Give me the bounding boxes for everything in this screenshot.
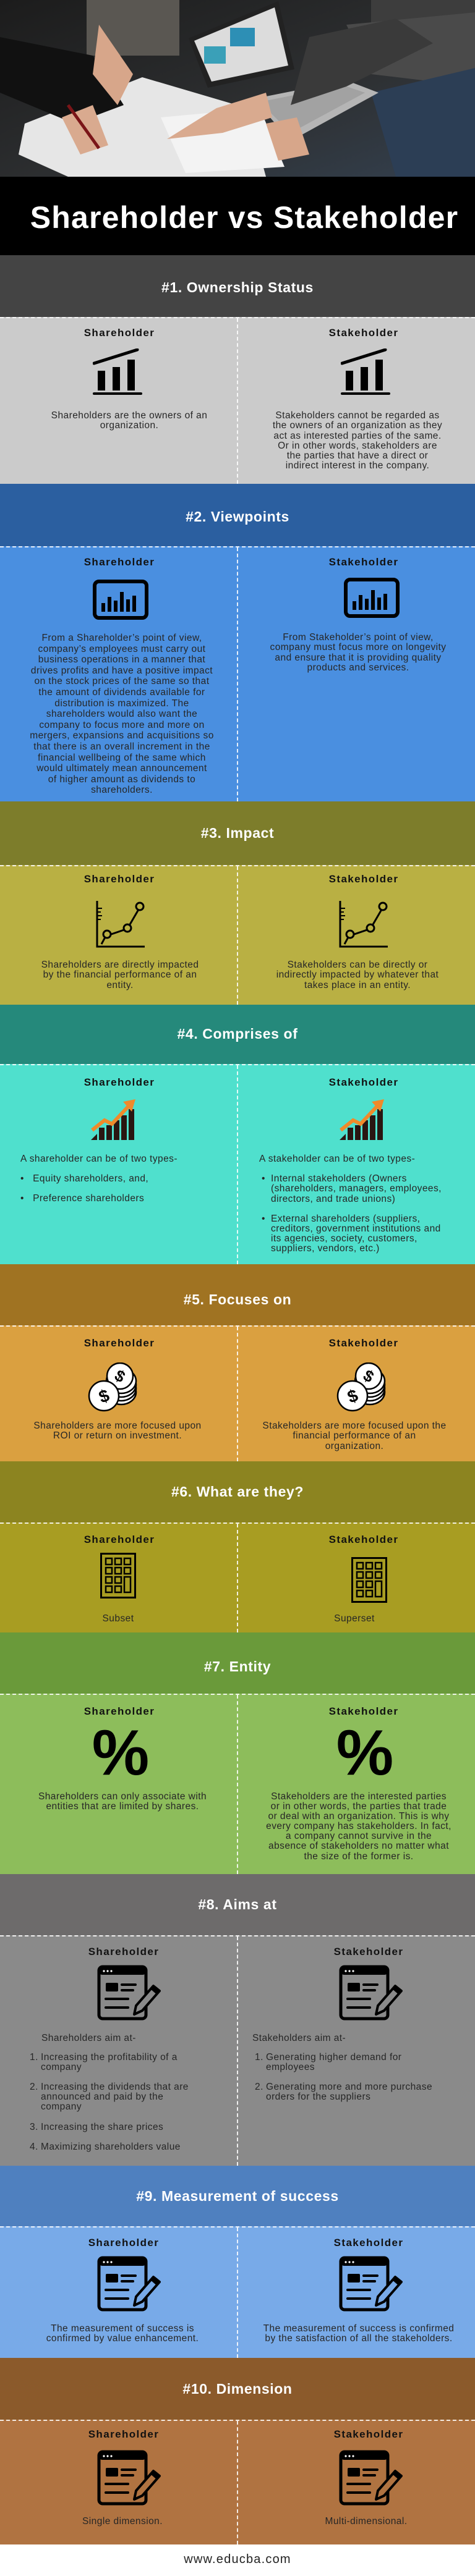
list: stakeholder aims: 2. [255, 2082, 263, 2092]
icon: growth left [91, 1099, 135, 1140]
text: shareholder viewpoint: company’s employees must carry out [38, 644, 205, 654]
text: stakeholder viewpoint [270, 632, 447, 673]
heading: Entity: #7. Entity [204, 1658, 271, 1674]
text: shareholder success: The measurement of success is [51, 2323, 194, 2334]
text: stakeholder ownership: indirect interest in the company. [286, 460, 429, 471]
list: stakeholder aims: 1. [255, 2052, 263, 2063]
icon: document pencil left [98, 2257, 161, 2311]
icon: document pencil left [97, 2450, 161, 2506]
text: stakeholder ownership [273, 410, 442, 471]
icon: grid building right [351, 1557, 387, 1603]
icon: percent right: % [336, 1717, 393, 1789]
text: stakeholder ownership: Or in other words, stakeholders are [278, 441, 437, 451]
text: stakeholder types: creditors, government institutions and [271, 1223, 441, 1234]
text: shareholder ownership: Shareholders are the owners of an [51, 410, 207, 421]
text: stakeholder entity [266, 1791, 451, 1862]
hero photo [0, 0, 475, 177]
heading: Comprises of: #4. Comprises of [178, 1026, 297, 1042]
text: multi-dimensional: Multi-dimensional. [325, 2516, 408, 2527]
icon: line chart right [339, 901, 388, 948]
text: shareholder types [20, 1154, 178, 1204]
section 8: Aims at [0, 1874, 475, 2166]
text: shareholder impact: entity. [106, 980, 134, 990]
text: stakeholder ownership: act as interested parties of the same. [273, 431, 442, 441]
text: shareholder types: • Preference shareholders [20, 1193, 144, 1204]
list: shareholder aims [30, 2033, 189, 2152]
label: Shareholder: Shareholder [84, 1534, 155, 1545]
label: Shareholder: Shareholder [88, 2237, 159, 2249]
text: stakeholder entity: or deal with an organization. This is why [268, 1811, 449, 1822]
text: subset: Subset [103, 1613, 134, 1624]
icon: dashboard right [344, 578, 400, 618]
list: shareholder aims: company [41, 2101, 82, 2112]
text: shareholder entity: Shareholders can only associate with [38, 1791, 207, 1802]
text: shareholder success: confirmed by value enhancement. [46, 2333, 199, 2344]
list: stakeholder aims: orders for the suppliers [266, 2092, 370, 2102]
text: stakeholder viewpoint: products and services. [307, 662, 409, 673]
heading: Focuses on: #5. Focuses on [184, 1291, 291, 1307]
heading: What are they: #6. What are they? [171, 1484, 304, 1500]
section 6: What are they? [0, 1461, 475, 1632]
text: stakeholder viewpoint: and ensure that it is providing quality [275, 652, 442, 663]
text: stakeholder ownership: the parties that have a direct or [287, 450, 428, 461]
text: stakeholder entity: absence of stakeholders no matter what [268, 1841, 449, 1851]
section 3: Impact [0, 801, 475, 1005]
text: single dimension: Single dimension. [82, 2516, 163, 2527]
list: shareholder aims: Shareholders aim at- [41, 2033, 136, 2043]
text: stakeholder viewpoint: company must focus more on longevity [270, 642, 447, 652]
list: shareholder aims: 4. [30, 2142, 38, 2152]
text: shareholder viewpoint: financial wellbeing of the same which [38, 753, 206, 763]
text: stakeholder impact: Stakeholders can be directly or [288, 960, 427, 970]
list: shareholder aims: Increasing the share prices [41, 2122, 163, 2132]
text: stakeholder types: Internal stakeholders (Owners [271, 1173, 407, 1184]
label: Stakeholder: Stakeholder [329, 1337, 398, 1349]
icon: bar chart left [93, 348, 142, 395]
text: shareholder viewpoint: the amount of dividends available for [38, 687, 205, 698]
text: shareholder viewpoint: of higher amount as dividends to [48, 774, 195, 785]
label: Stakeholder: Stakeholder [329, 1705, 398, 1717]
text: stakeholder types: suppliers, vendors, etc.) [271, 1243, 380, 1254]
label: Shareholder: Shareholder [84, 1705, 155, 1717]
text: shareholder viewpoint: shareholders would also want the [46, 709, 197, 719]
list: shareholder aims: Increasing the profitability of a [41, 2052, 178, 2063]
label: Stakeholder: Stakeholder [329, 1534, 398, 1545]
text: stakeholder focus: organization. [325, 1441, 383, 1451]
heading: Viewpoints: #2. Viewpoints [186, 509, 289, 525]
text: stakeholder entity: or in other words, the parties that trade [271, 1801, 447, 1812]
heading: Aims at: #8. Aims at [198, 1896, 277, 1912]
text: stakeholder impact: takes place in an entity. [304, 980, 411, 990]
label: Shareholder: Shareholder [84, 1076, 155, 1088]
text: stakeholder types: (shareholders, managers, employees, [271, 1183, 442, 1194]
text: stakeholder types: directors, and trade unions) [271, 1194, 395, 1204]
list: stakeholder aims: Generating higher demand for [266, 2052, 401, 2063]
text: shareholder viewpoint: distribution is maximized. The [54, 698, 189, 709]
label: Stakeholder: Stakeholder [329, 1076, 398, 1088]
label: Stakeholder: Stakeholder [329, 873, 398, 885]
text: shareholder viewpoint: would ultimately mean announcement [36, 763, 207, 774]
text: shareholder viewpoint: shareholders. [91, 785, 153, 795]
footer: website: www.educba.com [184, 2553, 291, 2566]
footer: website [0, 2544, 475, 2576]
text: stakeholder success: by the satisfaction of all the stakeholders. [265, 2333, 453, 2344]
text: stakeholder ownership: Stakeholders cannot be regarded as [275, 410, 440, 421]
list: stakeholder aims: Generating more and more purchase [266, 2082, 432, 2092]
text: shareholder focus: ROI or return on investment. [53, 1430, 182, 1441]
text: shareholder viewpoint [30, 633, 214, 795]
label: Stakeholder: Stakeholder [329, 327, 398, 339]
icon: coins right: $ [345, 1385, 361, 1407]
icon: growth right [340, 1099, 384, 1140]
list: stakeholder aims: employees [266, 2062, 315, 2072]
text: shareholder viewpoint: mergers, expansions and acquisitions so [30, 730, 214, 741]
label: Shareholder: Shareholder [88, 2428, 159, 2440]
text: stakeholder impact [276, 960, 439, 990]
label: Stakeholder: Stakeholder [329, 556, 398, 568]
icon: coins right: $ [360, 1366, 377, 1387]
list: shareholder aims: Increasing the dividends that are [41, 2082, 189, 2092]
list: shareholder aims: 2. [30, 2082, 38, 2092]
heading: Ownership Status: #1. Ownership Status [161, 279, 314, 295]
label: Shareholder: Shareholder [88, 1946, 159, 1957]
text: shareholder success [46, 2324, 199, 2344]
text: shareholder viewpoint: that there is an overall increment in the [33, 741, 210, 752]
text: stakeholder focus: Stakeholders are more focused upon the [262, 1421, 447, 1431]
text: shareholder impact: by the financial performance of an [43, 969, 197, 980]
icon: document pencil right [339, 1965, 403, 2021]
list: shareholder aims: 3. [30, 2122, 38, 2132]
label: Shareholder: Shareholder [84, 873, 155, 885]
label: Shareholder: Shareholder [84, 556, 155, 568]
label: Stakeholder: Stakeholder [334, 1946, 403, 1957]
heading: Dimension: #10. Dimension [182, 2381, 293, 2397]
text: shareholder viewpoint: on the stock prices of the same so that [35, 676, 209, 686]
text: shareholder entity: entities that are limited by shares. [46, 1801, 199, 1812]
text: stakeholder types: External shareholders (suppliers, [271, 1214, 420, 1224]
title [0, 177, 475, 255]
text: stakeholder impact: indirectly impacted by whatever that [276, 969, 439, 980]
section 10: Dimension [0, 2358, 475, 2544]
label: Stakeholder: Stakeholder [334, 2237, 403, 2249]
section 5: Focuses on [0, 1264, 475, 1461]
label: Shareholder: Shareholder [84, 1337, 155, 1349]
text: stakeholder viewpoint: From Stakeholder’s point of view, [283, 632, 434, 643]
list: stakeholder aims [252, 2033, 432, 2102]
text: shareholder viewpoint: From a Shareholder’s point of view, [41, 633, 202, 643]
icon: coins left: $ [96, 1385, 112, 1407]
text: stakeholder entity: a company cannot survive in the [286, 1831, 432, 1841]
text: stakeholder entity: every company has stakeholders. In fact, [266, 1821, 451, 1831]
list: stakeholder aims: Stakeholders aim at- [252, 2033, 346, 2043]
list: shareholder aims: Maximizing shareholders value [41, 2142, 181, 2152]
icon: coins right [336, 1362, 386, 1411]
text: shareholder viewpoint: drives profits and have a positive impact [31, 665, 213, 676]
text: stakeholder entity: the size of the former is. [304, 1851, 414, 1862]
section 1: Ownership Status [0, 255, 475, 484]
list: shareholder aims: 1. [30, 2052, 38, 2063]
label: Shareholder: Shareholder [84, 327, 155, 339]
text: shareholder types: • Equity shareholders, and, [20, 1173, 148, 1184]
text: shareholder types: A shareholder can be of two types- [20, 1154, 178, 1164]
text: stakeholder types: • [262, 1214, 265, 1224]
icon: coins left [88, 1362, 137, 1411]
text: stakeholder types: • [262, 1173, 265, 1184]
icon: bar chart right [341, 348, 390, 395]
section 9: Measurement of success [0, 2166, 475, 2358]
icon: document pencil left [98, 1965, 161, 2021]
heading: Measurement of success: #9. Measurement of success [136, 2188, 339, 2204]
text: stakeholder types: its agencies, society, customers, [271, 1233, 417, 1244]
list: shareholder aims: announced and paid by the [41, 2092, 163, 2102]
section 4: Comprises of [0, 1005, 475, 1264]
text: shareholder impact [41, 960, 199, 990]
text: shareholder focus [33, 1421, 202, 1441]
section 7: Entity [0, 1632, 475, 1874]
text: shareholder ownership [51, 410, 207, 431]
text: stakeholder focus: financial performance of an [293, 1430, 416, 1441]
text: shareholder entity [38, 1791, 207, 1812]
icon: dashboard left [93, 580, 148, 620]
title: Shareholder vs Stakeholder [30, 200, 458, 235]
text: shareholder ownership: organization. [100, 420, 158, 431]
text: stakeholder success [263, 2324, 454, 2344]
text: shareholder viewpoint: company to focus more and more on [39, 720, 205, 730]
text: stakeholder entity: Stakeholders are the interested parties [271, 1791, 447, 1802]
heading: Impact: #3. Impact [201, 825, 274, 841]
list: shareholder aims: company [41, 2062, 82, 2072]
text: stakeholder focus [262, 1421, 447, 1451]
text: shareholder impact: Shareholders are directly impacted [41, 960, 199, 970]
icon: document pencil right [339, 2257, 403, 2311]
icon: line chart left [96, 901, 145, 948]
text: stakeholder types: A stakeholder can be of two types- [259, 1154, 415, 1164]
text: superset: Superset [334, 1613, 375, 1624]
text: shareholder viewpoint: business operations in a manner that [38, 654, 205, 665]
label: Stakeholder: Stakeholder [334, 2428, 403, 2440]
icon: grid building left [100, 1553, 136, 1598]
icon: percent left: % [92, 1717, 149, 1789]
text: stakeholder ownership: the owners of an organization as they [273, 420, 442, 431]
text: stakeholder success: The measurement of success is confirmed [263, 2323, 454, 2334]
text: stakeholder types [259, 1154, 442, 1254]
section 2: Viewpoints [0, 484, 475, 801]
icon: coins left: $ [111, 1366, 129, 1387]
text: shareholder focus: Shareholders are more focused upon [33, 1421, 202, 1431]
icon: document pencil right [339, 2450, 403, 2506]
